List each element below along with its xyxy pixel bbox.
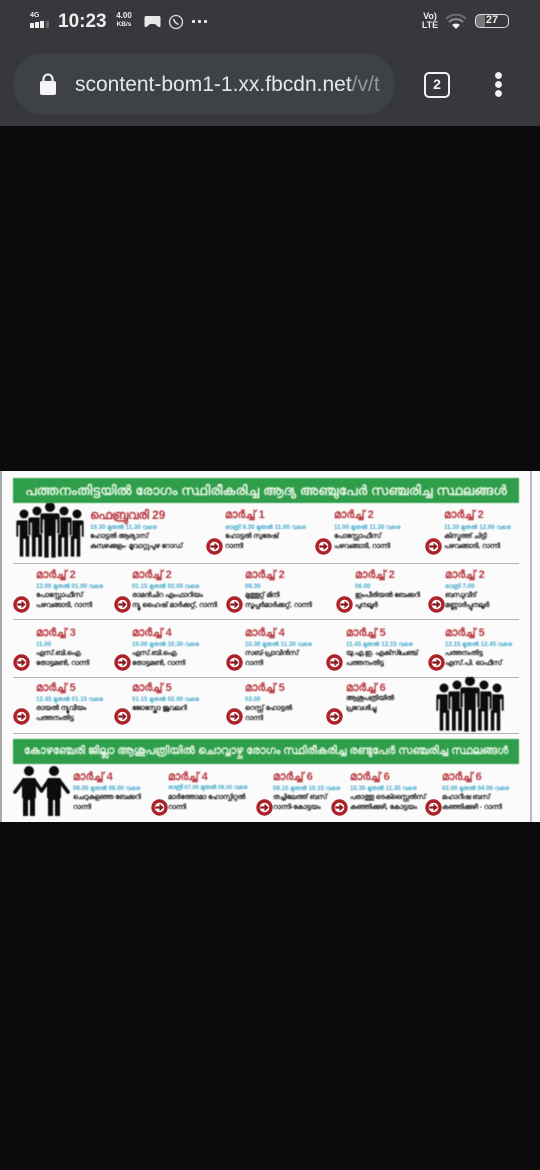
arrow: [151, 799, 168, 816]
row 1 cell: March 2: [444, 508, 512, 550]
infographic panel: 01.15 മുതൽ 02.00 വരെ: [132, 696, 199, 702]
infographic panel: പ്രവേശിച്ചു: [346, 705, 376, 712]
icon: lock: [40, 74, 56, 95]
infographic panel: മഹാറീഷ ബസ്: [442, 794, 490, 800]
infographic panel: ആശുപത്രിയിൽ: [346, 695, 394, 702]
icon: gamepad: [144, 16, 160, 28]
row 1 cell: Feb 29: [90, 508, 184, 551]
arrow: [326, 654, 343, 671]
row 4 cell: [244, 681, 246, 683]
row 5 cell: [272, 770, 274, 772]
icon: group of five people: [435, 677, 505, 733]
status bar: battery: [475, 14, 509, 28]
tab counter: [424, 72, 450, 98]
infographic panel: മാർച്ച് 5: [132, 682, 172, 694]
status bar: battery: 27: [486, 14, 498, 26]
arrow: [226, 596, 243, 613]
infographic panel: ബന്ധുവീട്: [445, 592, 476, 598]
row 4 cell: [132, 682, 200, 714]
row 4 cell: [36, 682, 104, 722]
infographic panel: റാന്നി: [225, 543, 243, 550]
infographic panel: മാർച്ച് 5: [36, 682, 76, 694]
infographic panel: 06.00: [355, 582, 370, 590]
status bar: data speed: [116, 11, 132, 28]
infographic panel: ഹോട്ടൽ ആര്യാസ്: [90, 533, 148, 540]
status bar: VoLTE: [422, 11, 438, 30]
arrow: [114, 596, 131, 613]
infographic panel: 12.45 മുതൽ 01.15 വരെ: [36, 696, 103, 702]
infographic panel: രാമൻചിറ എംഫാറിയം: [132, 592, 203, 598]
row 5 cell: [349, 770, 351, 772]
infographic panel: മാർച്ച് 2: [444, 509, 484, 521]
row 5 cell: [72, 770, 74, 772]
row 2 cell: [36, 568, 104, 608]
infographic panel: 11.30 മുതൽ 12.00 വരെ: [444, 524, 511, 530]
infographic panel: 11.00: [36, 640, 51, 648]
arrow: [428, 654, 445, 671]
infographic panel: മാർച്ച് 2: [245, 569, 285, 581]
infographic panel: പത്തനംതിട്ട: [36, 714, 74, 722]
arrow: [256, 799, 273, 816]
row 2 cell: [354, 568, 421, 610]
arrow: [114, 708, 131, 725]
row 4 cell: [345, 681, 347, 683]
row 1 cell: March 2: [334, 508, 402, 550]
infographic panel: റാന്നി: [245, 660, 263, 666]
row 3 cell: [444, 626, 513, 668]
infographic panel: എസ്.ബി.ഐ.: [132, 650, 178, 656]
arrow: [425, 799, 442, 816]
infographic panel: മാർച്ച് 5: [445, 627, 485, 639]
status bar: data speed: 4.00: [116, 11, 132, 20]
arrow: [336, 596, 353, 613]
heading: first five: പത്തനംതിട്ടയിൽ രോഗം സ്ഥിരീകരിച്ച ആദ്യ അഞ്ചുപേർ സഞ്ചരിച്ച സ്ഥലങ്ങൾ: [25, 483, 507, 498]
infographic panel: റാന്നി: [168, 804, 186, 810]
row 2 cell: [132, 568, 218, 612]
infographic panel: മാർച്ച് 4: [245, 627, 285, 639]
infographic panel: 08.30: [245, 582, 260, 590]
row 5 cell: [441, 770, 443, 772]
arrow: [226, 708, 243, 725]
heading: second group: കോഴഞ്ചേരി ജില്ലാ ആശുപത്രിയിൽ ചൊവ്വാഴ്ച രോഗം സ്ഥിരീകരിച്ച രണ്ടുപേർ സഞ്ചരിച്ച സ്ഥലങ്ങൾ: [24, 745, 508, 757]
row 1 cell: March 1: [224, 508, 306, 550]
infographic panel: 12.00 മുതൽ 01.00 വരെ: [36, 582, 103, 590]
infographic panel: പഴവങ്ങാടി, റാന്നി: [36, 602, 92, 608]
infographic panel: മാർച്ച് 6: [350, 771, 390, 783]
arrow: [206, 538, 223, 555]
infographic panel: 11.45 മുതൽ 12.15 വരെ: [346, 640, 413, 648]
infographic panel: മാർച്ച് 2: [36, 569, 76, 581]
infographic panel: റാന്നി-കോട്ടയം: [273, 804, 321, 810]
infographic panel: ഇംപീരിയൽ ബേക്കറി: [355, 592, 420, 598]
heading: first five: [13, 478, 519, 503]
status bar: overflow dots: [192, 20, 208, 23]
infographic panel: കിസ്മത്ത് ചിട്ടി: [444, 533, 487, 540]
arrow: [13, 596, 30, 613]
infographic panel: ചെറുകുളഞ്ഞ ബേക്കറി: [73, 794, 141, 800]
address bar: [13, 54, 395, 114]
icon: group of five people: [16, 502, 84, 558]
infographic panel: മാർച്ച് 1: [225, 509, 265, 521]
infographic panel: ജോസ്കോ ജൂവലറി: [132, 704, 187, 712]
infographic panel: പോസ്റ്റോഫീസ്: [36, 592, 83, 598]
infographic panel: മാർച്ച് 6: [273, 771, 313, 783]
infographic panel: കഞ്ഞിക്കുഴി, കോട്ടയം: [350, 804, 417, 810]
infographic panel: 12.15 മുതൽ 12.45 വരെ: [445, 640, 512, 648]
infographic panel: മാർച്ച് 2: [355, 569, 395, 581]
infographic panel: മാർച്ച് 4: [168, 771, 208, 783]
infographic panel: 08.15 മുതൽ 10.15 വരെ: [273, 784, 340, 792]
infographic panel: മാർച്ച് 2: [334, 509, 374, 521]
status bar: VoLTE: LTE: [422, 20, 438, 30]
infographic panel: 11.00 മുതൽ 11.30 വരെ: [334, 524, 400, 530]
menu dots: [495, 72, 502, 97]
infographic panel: പത്തനംതിട്ട: [445, 650, 483, 656]
row 3 cell: [244, 626, 312, 666]
infographic panel: മാർച്ച് 5: [346, 627, 386, 639]
arrow: [315, 538, 332, 555]
infographic panel: സബ്-പ്രാവിൻസ്: [245, 650, 299, 656]
status bar: clock: 10:23: [58, 11, 107, 32]
infographic panel: 06.00 മുതൽ 08.00 വരെ: [73, 784, 140, 792]
infographic panel: 03.00: [245, 696, 260, 702]
arrow: [331, 799, 348, 816]
infographic panel: കഞ്ഞിക്കുഴി - റാന്നി: [442, 804, 502, 810]
infographic panel: റെസ്റ്റ് ഹോട്ടൽ: [245, 704, 292, 712]
row 2 cell: [244, 568, 313, 610]
infographic panel: രാത്രി 9.30 മുതൽ 11.00 വരെ: [225, 524, 306, 530]
infographic panel: പുനലൂർ: [355, 602, 378, 608]
icon: two people holding hands: [13, 765, 71, 818]
tab counter: 2: [433, 76, 441, 92]
row 3 cell: [346, 626, 420, 668]
infographic panel: രാത്രി 7.00: [445, 582, 475, 590]
arrow: [326, 708, 343, 725]
icon: wifi: [446, 14, 466, 29]
infographic panel: തോട്ടമൺ, റാന്നി: [36, 660, 89, 666]
infographic panel: പരാത്തു ടെക്സ്റ്റൈൽസ്: [350, 794, 426, 800]
infographic panel: പത്തനംതിട്ട: [346, 660, 384, 666]
row 2 cell: [444, 568, 490, 612]
infographic panel: പഴവങ്ങാടി, റാന്നി: [444, 543, 500, 550]
infographic panel: റാന്നി: [245, 714, 263, 722]
infographic panel: ഹോട്ടൽ സുരേഷ്: [225, 533, 279, 540]
arrow: [114, 654, 131, 671]
heading: second group: [13, 739, 519, 764]
infographic panel: മാർച്ച് 4: [73, 771, 113, 783]
infographic panel: റാന്നി: [73, 804, 91, 810]
infographic panel: 01.15 മുതൽ 02.00 വരെ: [132, 582, 199, 590]
icon: whatsapp: [168, 14, 184, 30]
infographic panel: എസ്.ബി.ഐ.: [36, 650, 82, 656]
infographic panel: മാർച്ച് 2: [445, 569, 485, 581]
infographic panel: മുത്തൂറ്റ് മിനി: [245, 592, 279, 598]
infographic panel: മാർച്ച് 6: [346, 682, 386, 694]
infographic panel: 10.00 മുതൽ 10.30 വരെ: [132, 640, 199, 648]
infographic panel: മാർച്ച് 6: [442, 771, 482, 783]
infographic panel: യു.എ.ഇ. എക്സ്ചേഞ്ച്: [346, 650, 418, 656]
arrow: [226, 654, 243, 671]
infographic panel: മാർച്ച് 3: [36, 627, 76, 639]
row 3 cell: [132, 626, 200, 668]
infographic panel: മാർച്ച് 2: [132, 569, 172, 581]
infographic panel: മാർച്ച് 5: [245, 682, 285, 694]
status bar: data speed: KB/s: [117, 21, 131, 28]
infographic panel: 10.30 മുതൽ 11.30 വരെ: [245, 640, 312, 648]
arrow: [13, 708, 30, 725]
infographic panel: മാർത്തോമാ ഹോസ്പിറ്റൽ: [168, 794, 245, 800]
infographic panel: ഫെബ്രുവരി 29: [90, 508, 165, 522]
infographic panel: രാത്രി 07.00 മുതൽ 08.30 വരെ: [168, 784, 247, 790]
infographic panel: മണ്ണാർപ്പുനലൂർ: [445, 602, 489, 608]
infographic panel: സൂപ്പർമാർക്കറ്റ്, റാന്നി: [245, 602, 312, 608]
infographic panel: തച്ചിലേത്ത് ബസ്: [273, 794, 327, 800]
infographic panel: രായൽ ന്യൂവീയം: [36, 704, 86, 712]
url: scontent-bom1-1.xx.fbcdn.net/v/t: [75, 73, 380, 96]
infographic panel: എസ്.പി. ഓഫീസ്: [445, 660, 502, 666]
row 5 cell: [167, 770, 169, 772]
infographic panel: പഴവങ്ങാടി, റാന്നി: [334, 543, 390, 550]
infographic panel: ന്യൂ ഹൈഷ് മാർക്കറ്റ്, റാന്നി: [132, 602, 217, 608]
arrow: [425, 538, 442, 555]
infographic panel: മാർച്ച് 4: [132, 627, 172, 639]
row 3 cell: [36, 626, 90, 668]
infographic panel: തോട്ടമൺ, റാന്നി: [132, 660, 185, 666]
infographic panel: [0, 471, 540, 822]
status bar: network: 4G: [30, 12, 39, 19]
infographic panel: 10.30 മുതൽ 11.30 വരെ: [90, 524, 157, 530]
arrow: [13, 654, 30, 671]
status bar: VoLTE: Vo): [423, 11, 437, 21]
arrow: [428, 596, 445, 613]
infographic panel: 02.00 മുതൽ 04.00 വരെ: [442, 784, 509, 792]
infographic panel: 10.30 മുതൽ 11.30 വരെ: [350, 784, 417, 792]
phone browser chrome: [0, 0, 540, 126]
infographic panel: പോസ്റ്റോഫീസ്: [334, 533, 381, 540]
infographic panel: കുമ്പഴക്കുളം- മൂവാറ്റുപുഴ റോഡ്: [90, 543, 183, 550]
